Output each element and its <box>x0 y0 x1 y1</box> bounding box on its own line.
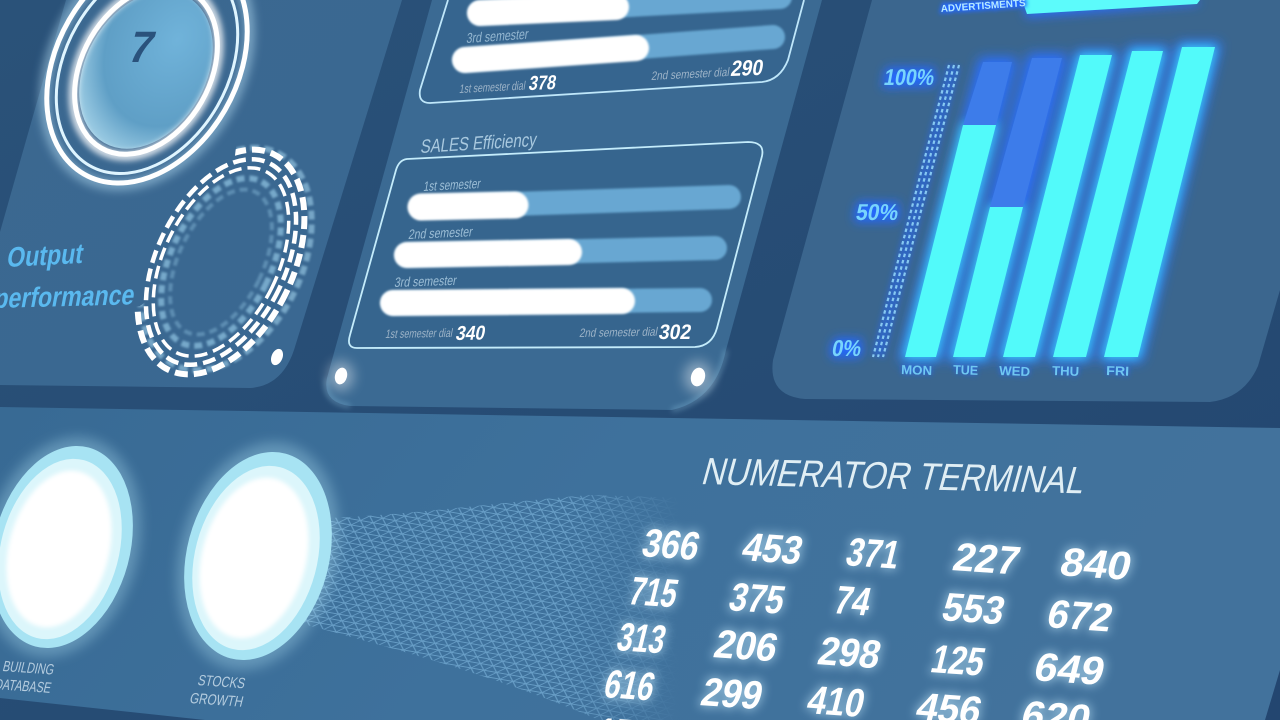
dial values upper <box>459 55 765 96</box>
frame: sales efficiency <box>349 142 762 348</box>
dial number: 7 <box>123 23 161 72</box>
bar: MON <box>901 62 1012 378</box>
number values: 299 <box>697 670 768 718</box>
axis labels: 0% <box>830 335 864 361</box>
heading: output performance: Output <box>5 237 86 273</box>
number values: 313 <box>613 615 671 662</box>
bar: THU <box>1052 51 1163 379</box>
panel: efficiency bars <box>326 0 822 410</box>
bar: THU: THU <box>1052 363 1079 379</box>
bar: TUE: TUE <box>953 362 979 378</box>
numeric table <box>592 521 1137 720</box>
panel: output performance <box>0 0 402 401</box>
number values: 649 <box>1030 645 1110 694</box>
number values: 227 <box>949 535 1025 583</box>
button: building database <box>0 432 146 693</box>
bar: TUE <box>953 58 1062 378</box>
number glow: 616 <box>600 662 660 709</box>
axis labels: 100% <box>882 64 937 90</box>
day label glow: WED <box>999 363 1030 379</box>
number values: 298 <box>814 629 886 677</box>
bar: 3rd semester: 3rd semester <box>393 273 458 290</box>
number values: 453 <box>738 525 808 573</box>
number values: 366 <box>638 521 705 569</box>
day label glow: THU <box>1052 363 1079 379</box>
number glow: 715 <box>625 569 683 616</box>
heading: sales efficiency: SALES Efficiency <box>419 130 538 158</box>
number glow: 299 <box>697 670 768 718</box>
axis labels: 50% <box>854 199 901 225</box>
number glow: 375 <box>725 575 790 623</box>
heading: numerator terminal: NUMERATOR TERMINAL <box>698 451 1091 502</box>
number values: 840 <box>1056 540 1137 589</box>
axis labels: 50% <box>854 199 901 225</box>
bar: 1st semester <box>421 176 729 207</box>
number glow: 206 <box>710 622 783 670</box>
bar: 3rd semester upper <box>465 37 773 60</box>
number glow: 298 <box>814 629 886 677</box>
dial values: 340 <box>454 323 487 345</box>
button: stocks growth: GROWTH <box>188 690 245 711</box>
number glow: 649 <box>1030 645 1110 694</box>
chart bloom <box>905 47 1215 357</box>
number values: 715 <box>625 569 683 616</box>
dial values <box>384 321 693 345</box>
axis labels: 100% <box>882 64 937 90</box>
gauge: dashed ring <box>134 144 316 378</box>
button: stocks growth <box>172 438 344 707</box>
bar: MON: MON <box>901 362 932 378</box>
number values: 125 <box>927 637 990 684</box>
day label glow <box>901 362 1129 379</box>
dial values upper: 2nd semester dial <box>651 65 731 83</box>
number glow: 366 <box>638 521 705 569</box>
number values: 553 <box>938 585 1010 633</box>
advertisments bar <box>940 0 1200 18</box>
number values: 206 <box>710 622 783 670</box>
day label glow: FRI <box>1106 363 1129 379</box>
indicator dot <box>269 347 285 367</box>
bar: FRI <box>1104 47 1215 379</box>
panel: weekly bar chart <box>772 0 1280 402</box>
panel: numerator terminal <box>0 407 1280 720</box>
day label glow: MON <box>901 362 932 378</box>
wave mesh <box>304 495 658 720</box>
number glow: 672 <box>1043 592 1118 640</box>
chart glow <box>905 47 1215 357</box>
number glow: 840 <box>1056 540 1137 589</box>
number glow: 74 <box>830 578 876 624</box>
axis labels <box>830 64 937 361</box>
bar: 3rd semester <box>393 273 700 303</box>
number glow: 313 <box>613 615 671 662</box>
bar: FRI: FRI <box>1106 363 1129 379</box>
number values <box>592 521 1137 720</box>
number values: 371 <box>842 530 905 577</box>
bar: 2nd semester <box>407 224 715 255</box>
number glow: 453 <box>738 525 808 573</box>
number glow: 227 <box>949 535 1025 583</box>
number values: 672 <box>1043 592 1118 640</box>
dial values: 302 <box>657 321 693 344</box>
number glow: 125 <box>927 637 990 684</box>
number glow <box>600 521 1137 720</box>
day label glow: TUE <box>953 362 979 378</box>
bar: 2nd semester: 2nd semester <box>407 224 474 242</box>
bar: WED: WED <box>999 363 1030 379</box>
number glow: 371 <box>842 530 905 577</box>
number glow: 553 <box>938 585 1010 633</box>
axis labels: 0% <box>830 335 864 361</box>
dial values: 1st semester dial <box>384 326 454 341</box>
bar: WED <box>999 55 1112 379</box>
dial values upper: 378 <box>527 72 558 95</box>
dial values upper: 1st semester dial <box>459 79 527 96</box>
number values: 616 <box>600 662 660 709</box>
indicator dots <box>328 361 712 393</box>
dial values: 2nd semester dial <box>578 325 659 340</box>
button: stocks growth: STOCKS <box>196 672 247 692</box>
chart axis ticks <box>873 65 959 357</box>
bar: 1st semester: 1st semester <box>423 176 482 194</box>
bar label: 3rd semester <box>466 26 530 46</box>
bar: 2nd semester upper <box>480 0 780 13</box>
frame: upper bars <box>420 0 804 103</box>
button: building database: BUILDING <box>1 658 56 678</box>
heading: output performance <box>0 237 138 314</box>
gauge: dial ring <box>3 0 291 222</box>
number values: 375 <box>725 575 790 623</box>
dial values upper: 290 <box>729 55 765 81</box>
number values: 74 <box>830 578 876 624</box>
